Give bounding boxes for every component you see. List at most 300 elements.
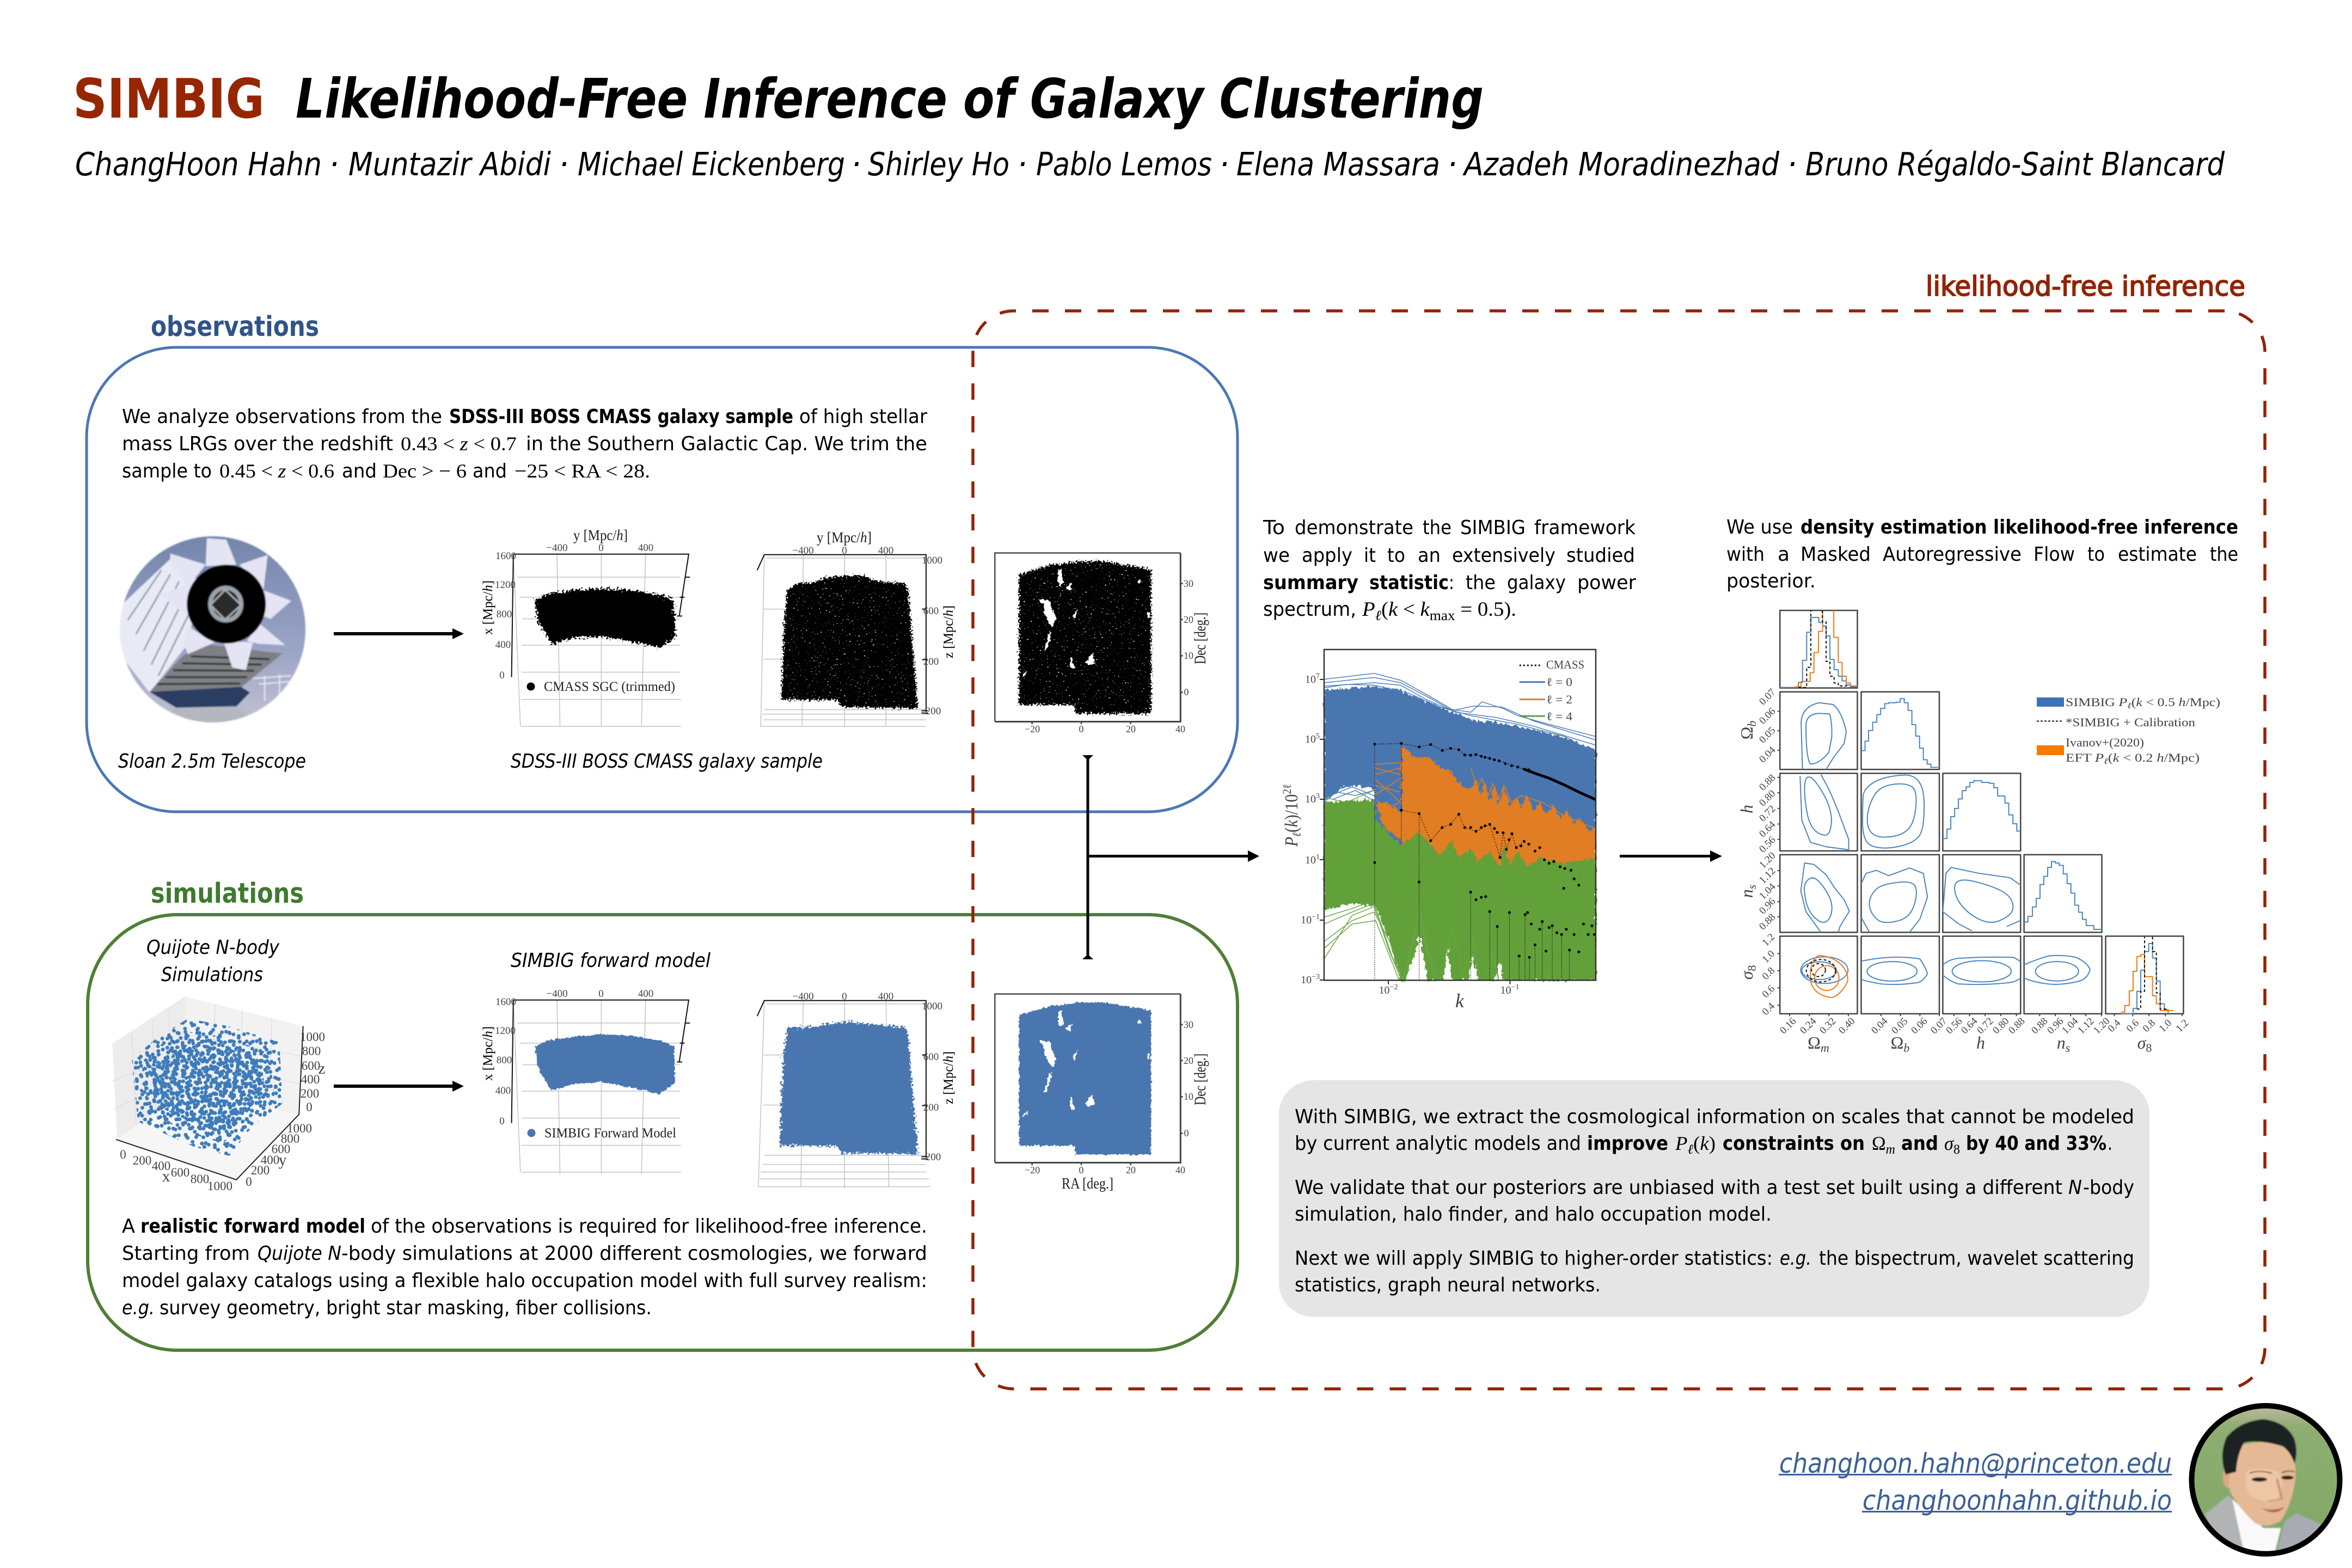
text block: power spectrum description: an <box>1418 544 1441 567</box>
text block: observations intro: and <box>342 460 377 482</box>
text: next steps: statistics, graph neural networks. <box>1295 1274 1601 1296</box>
chart: CMASS sky map RA-Dec: 40 <box>1175 724 1185 734</box>
legend: SIMBIG Forward Model: SIMBIG Forward Model <box>544 1126 676 1141</box>
text block: power spectrum description: it <box>1364 544 1376 567</box>
chart: SIMBIG forward model x-y projection <box>481 988 690 1174</box>
chart: CMASS 3D x-y projection: 800 <box>497 609 512 620</box>
axis titles: b <box>1745 721 1759 727</box>
text block: power spectrum description: framework <box>1534 517 1636 539</box>
text block: power spectrum description: ℓ <box>1375 608 1381 623</box>
legend: corner plot: Ivanov+(2020) <box>2066 736 2144 749</box>
axis tick labels: 0.16 <box>1778 1015 1799 1037</box>
chart: power spectrum multipoles: −3 <box>1312 973 1320 981</box>
legend: corner plot: SIMBIG P <box>2066 695 2126 709</box>
text block: power spectrum description: summary <box>1263 572 1358 594</box>
chart: CMASS sky map RA-Dec: −20 <box>1025 724 1040 734</box>
chart: Quijote 3D scatter cube: 400 <box>301 1073 320 1086</box>
axis tick labels: 0.88 <box>1757 911 1778 933</box>
caption: SIMBIG forward model: SIMBIG forward model <box>511 950 710 972</box>
axis titles: Ω <box>1808 1033 1821 1052</box>
chart: power spectrum multipoles: k <box>1455 990 1465 1012</box>
chart: SIMBIG forward model x-y projection: 400 <box>495 1085 511 1097</box>
axis tick labels: 1.12 <box>1757 865 1778 886</box>
text block: forward model description: Quijote N <box>258 1242 341 1265</box>
text: next steps: Next we will apply SIMBIG to higher-order statistics: <box>1295 1247 1773 1270</box>
axis tick labels: 0.4 <box>1760 1000 1778 1018</box>
text block: likelihood-free method: estimate <box>2118 543 2197 566</box>
text block: power spectrum description: apply <box>1302 544 1352 567</box>
legend: CMASS SGC: CMASS SGC (trimmed) <box>544 679 675 694</box>
axis tick labels: 1.04 <box>1757 881 1778 902</box>
axis tick labels: 1.2 <box>1760 932 1777 948</box>
text block: observations intro: −25 < RA < 28. <box>514 460 650 482</box>
heading: simulations: simulations <box>151 878 304 910</box>
chart: CMASS 3D y-z projection: 1000 <box>922 555 942 566</box>
chart: power spectrum multipoles: ( <box>1282 827 1302 832</box>
authors: · <box>1447 145 1457 183</box>
axis tick labels: 0.07 <box>1757 687 1778 708</box>
axis tick labels: 1.0 <box>2157 1018 2174 1034</box>
axis tick labels: 0.32 <box>1817 1015 1839 1037</box>
legend: corner plot: *SIMBIG + Calibration <box>2066 715 2195 729</box>
text: result: and <box>1901 1132 1938 1155</box>
title: Likelihood-Free Inference of Galaxy Clustering <box>296 67 1484 131</box>
text block: forward model description: of the observations is required for likelihood-free inference. <box>371 1215 927 1238</box>
chart: power spectrum multipoles: −2 <box>1390 983 1398 991</box>
authors: · <box>851 145 861 183</box>
axis titles: σ <box>1737 971 1756 979</box>
axis titles: Ω <box>1737 727 1756 739</box>
chart: CMASS sky map RA-Dec: 0 <box>1184 687 1189 697</box>
chart: power spectrum multipoles: −1 <box>1312 913 1320 921</box>
legend: corner plot: ℓ <box>2104 757 2108 766</box>
axis tick labels: 1.04 <box>2060 1015 2081 1037</box>
chart: CMASS 3D x-y projection: y [Mpc/h] <box>573 527 628 543</box>
chart: CMASS 3D y-z projection: 600 <box>923 605 939 617</box>
text block: power spectrum description: galaxy <box>1507 572 1566 594</box>
chart: power spectrum multipoles: 10 <box>1305 673 1316 685</box>
chart: power spectrum multipoles: 10 <box>1305 733 1316 745</box>
text block: likelihood-free method: the <box>2210 543 2238 566</box>
authors: · <box>1219 145 1229 183</box>
text block: power spectrum description: we <box>1263 544 1290 567</box>
chart: Quijote 3D scatter cube: 600 <box>272 1142 290 1156</box>
authors <box>75 145 2225 183</box>
chart: SIMBIG forward model y-z projection: 1000 <box>922 1001 942 1012</box>
axis tick labels: 1.12 <box>2075 1015 2097 1037</box>
chart: SIMBIG forward model x-y projection: 0 <box>598 988 604 1000</box>
chart: SIMBIG forward model y-z projection: 600 <box>923 1051 939 1063</box>
text: result: improve <box>1587 1132 1668 1155</box>
text block: likelihood-free method: We use <box>1726 516 1793 538</box>
chart: SIMBIG forward model y-z projection: 0 <box>842 991 847 1002</box>
legend: corner plot: ℓ <box>2127 702 2132 710</box>
axis tick labels: 1.20 <box>2091 1015 2112 1037</box>
text block: power spectrum description: SIMBIG <box>1460 517 1526 539</box>
text block: likelihood-free method: posterior. <box>1726 570 1816 592</box>
axis tick labels: 0.05 <box>1757 725 1778 746</box>
chart: power spectrum multipoles: P <box>1282 837 1302 847</box>
panel: observations box <box>87 347 1238 812</box>
panel frames <box>1780 610 2183 1014</box>
caption: Quijote N-body simulations <box>146 936 280 986</box>
axis tick labels: 0.8 <box>2141 1018 2158 1034</box>
chart: CMASS sky map RA-Dec: 20 <box>1126 724 1136 734</box>
text block: observations intro <box>122 406 927 482</box>
icon: Sloan telescope photo <box>117 534 309 726</box>
chart: SIMBIG forward model sky map: 10 <box>1184 1091 1193 1102</box>
axis tick labels: 0.6 <box>1760 983 1777 1000</box>
text block: power spectrum description: statistic <box>1369 572 1449 594</box>
text: result <box>1295 1106 2134 1157</box>
chart: SIMBIG forward model sky map: 0 <box>1184 1128 1189 1138</box>
axis tick labels <box>1757 687 2191 1037</box>
chart: CMASS 3D x-y projection: 0 <box>598 542 604 554</box>
caption: Quijote N-body simulations: Simulations <box>161 964 263 986</box>
panel: summary callout <box>1279 1080 2149 1317</box>
chart: Quijote 3D scatter cube <box>112 996 326 1193</box>
chart: CMASS 3D y-z projection: 400 <box>878 545 893 556</box>
text block: observations intro: Dec > − 6 <box>383 460 467 482</box>
chart: CMASS sky map RA-Dec: Dec [deg.] <box>1191 612 1209 664</box>
chart: CMASS 3D y-z projection: 200 <box>926 706 941 717</box>
axis tick labels: 0.6 <box>2124 1018 2141 1034</box>
chart: SIMBIG forward model x-y projection: x [Mpc/h] <box>481 1026 495 1081</box>
chart: Quijote 3D scatter cube: 600 <box>302 1059 320 1073</box>
text block: forward model description <box>122 1215 927 1319</box>
text block: power spectrum description: power <box>1577 572 1636 594</box>
text block: observations intro: 0.43 < z < 0.7 <box>401 433 517 455</box>
axis titles: n <box>1737 889 1756 898</box>
text: result: m <box>1886 1142 1895 1157</box>
text block: likelihood-free method: with <box>1726 543 1765 566</box>
chart: CMASS 3D y-z projection: −400 <box>792 545 814 556</box>
text block: forward model description: Starting from <box>122 1242 250 1265</box>
text block: power spectrum description: k < k <box>1388 598 1429 621</box>
chart area: spectra bands <box>1324 686 1596 981</box>
text block: observations intro: sample to <box>122 460 212 482</box>
chart: SIMBIG forward model sky map: −20 <box>1025 1165 1040 1175</box>
axis tick labels: 0.07 <box>1928 1015 1950 1037</box>
authors: Michael Eickenberg <box>578 145 845 183</box>
chart: CMASS 3D y-z projection: 200 <box>923 656 939 667</box>
text: next steps: the bispectrum, wavelet scattering <box>1819 1247 2134 1270</box>
text block: forward model description: A <box>122 1215 135 1238</box>
legend: power spectrum: ℓ = 0 <box>1546 675 1572 689</box>
chart: Quijote 3D scatter cube: 400 <box>152 1159 170 1173</box>
axis tick labels: 0.06 <box>1757 706 1778 727</box>
authors: Bruno Régaldo-Saint Blancard <box>1805 145 2225 183</box>
chart: Quijote 3D scatter cube: 200 <box>301 1087 319 1100</box>
text block: likelihood-free method: to <box>2087 543 2105 566</box>
chart: SIMBIG forward model sky map: 30 <box>1184 1019 1193 1030</box>
axis tick labels: 0.56 <box>1944 1015 1965 1037</box>
text: result: σ <box>1944 1132 1954 1154</box>
text block: likelihood-free method: a <box>1778 543 1790 566</box>
chart: power spectrum multipoles: k)/10 <box>1282 790 1302 827</box>
chart: power spectrum multipoles: 2ℓ <box>1280 784 1294 794</box>
text block: observations intro: in the Southern Galactic Cap. We trim the <box>526 433 927 455</box>
chart: CMASS sky map RA-Dec: 10 <box>1184 650 1193 661</box>
axis tick labels: 0.88 <box>2006 1015 2028 1037</box>
text block: power spectrum description: the <box>1423 517 1451 539</box>
chart: power spectrum multipoles: 5 <box>1316 732 1320 740</box>
text: validation: We validate that our posteriors are unbiased with a test set built using a different <box>1295 1177 2062 1199</box>
axis titles: Ω <box>1891 1033 1903 1052</box>
axis titles: h <box>1737 805 1756 813</box>
text block: likelihood-free method: Masked <box>1800 543 1871 566</box>
axis titles: s <box>1745 885 1759 889</box>
axis tick labels: 0.88 <box>1757 772 1778 793</box>
text block: observations intro: mass LRGs over the redshift <box>122 433 393 455</box>
text: validation: simulation, halo finder, and halo occupation model. <box>1295 1203 1772 1226</box>
text block: observations intro: and <box>473 460 507 482</box>
chart: power spectrum multipoles: 10 <box>1301 974 1312 986</box>
text block: observations intro: 0.45 < z < 0.6 <box>219 460 334 482</box>
authors: · <box>1787 145 1797 183</box>
axis tick labels: 0.64 <box>1757 819 1778 840</box>
icon: author portrait <box>2189 1405 2343 1555</box>
chart: Quijote 3D scatter cube: 1000 <box>287 1122 312 1135</box>
chart: power spectrum multipoles: 10 <box>1305 793 1316 805</box>
text block: power spectrum description: the <box>1466 572 1496 594</box>
text: result: Ω <box>1872 1132 1886 1154</box>
axis titles: 8 <box>1745 965 1759 971</box>
legend: power spectrum: CMASS <box>1546 658 1584 671</box>
legend: corner plot <box>2037 695 2220 766</box>
chart: CMASS 3D x-y projection: 1200 <box>495 579 516 591</box>
axis titles: b <box>1903 1041 1909 1055</box>
chart: power spectrum multipoles: 1 <box>1316 853 1320 861</box>
chart: CMASS 3D x-y projection: 1600 <box>495 550 516 562</box>
axis tick labels: 0.64 <box>1959 1015 1980 1037</box>
legend: power spectrum: ℓ = 2 <box>1546 693 1572 706</box>
legend: corner plot: ( <box>2132 695 2136 709</box>
text block: likelihood-free method: density estimation likelihood-free inference <box>1800 516 2238 538</box>
chart area: CMASS data points <box>1373 742 1596 959</box>
chart: power spectrum multipoles <box>1280 650 1596 1012</box>
chart: Quijote 3D scatter cube: 1000 <box>300 1030 325 1044</box>
chart: SIMBIG forward model x-y projection: −400 <box>546 988 568 1000</box>
axis titles: σ <box>2137 1033 2146 1052</box>
chart: SIMBIG forward model y-z projection: 400 <box>878 991 893 1002</box>
chart area: fringe lines <box>1324 673 1596 981</box>
axis tick labels: 0.56 <box>1757 834 1778 855</box>
heading: likelihood-free inference: likelihood-free inference <box>1926 271 2245 302</box>
axis tick labels: 0.72 <box>1975 1015 1996 1037</box>
text block: forward model description: model galaxy catalogs using a flexible halo occupation model with full survey realism: <box>122 1270 927 1292</box>
chart: SIMBIG forward model sky map: RA [deg.] <box>1062 1175 1113 1192</box>
authors: · <box>559 145 569 183</box>
chart: Quijote 3D scatter cube: 800 <box>302 1044 321 1058</box>
text: result: k) <box>1700 1132 1716 1154</box>
chart: SIMBIG forward model x-y projection: 0 <box>499 1116 505 1127</box>
authors: Azadeh Moradinezhad <box>1462 145 1779 183</box>
text block: forward model description: -body simulations at 2000 different cosmologies, we forward <box>341 1242 927 1265</box>
caption: Quijote N-body simulations: Quijote N-body <box>146 936 280 959</box>
chart: CMASS 3D x-y projection: 400 <box>638 542 653 554</box>
axis titles: s <box>2066 1041 2070 1055</box>
text: result: by current analytic models and <box>1295 1132 1581 1155</box>
axis tick labels: 0.80 <box>1757 788 1778 809</box>
text block: likelihood-free method <box>1726 516 2238 592</box>
title: SIMBIG <box>73 67 265 131</box>
text: validation <box>1295 1177 2134 1226</box>
authors: Pablo Lemos <box>1036 145 1212 183</box>
text block: likelihood-free method: Flow <box>2033 543 2075 566</box>
arrow: telescope to CMASS <box>334 628 464 639</box>
chart: power spectrum multipoles: 10 <box>1379 984 1390 996</box>
text block: power spectrum description: = 0.5). <box>1455 598 1516 621</box>
chart: power spectrum multipoles: ℓ <box>1290 832 1303 837</box>
authors: · <box>1017 145 1027 183</box>
axis tick labels: 0.24 <box>1798 1015 1819 1037</box>
chart: SIMBIG forward model x-y projection: 1200 <box>495 1025 516 1037</box>
chart: power spectrum multipoles: 10 <box>1305 854 1316 866</box>
text: result: 8 <box>1953 1142 1960 1157</box>
panel: simulations box <box>88 915 1238 1350</box>
text block: power spectrum description <box>1263 517 1636 623</box>
chart: power spectrum multipoles: 7 <box>1316 672 1320 681</box>
chart: CMASS 3D x-y projection: 400 <box>495 639 511 651</box>
text: validation: -body <box>2083 1177 2134 1199</box>
text block: power spectrum description: studied <box>1566 544 1635 567</box>
text block: power spectrum description: To <box>1263 517 1285 539</box>
chart: SIMBIG forward model y-z projection: −400 <box>792 991 814 1002</box>
authors: ChangHoon Hahn <box>75 145 322 183</box>
text block: forward model description: e.g. <box>122 1297 155 1319</box>
scatter points <box>132 1019 283 1156</box>
text block: power spectrum description: : <box>1449 572 1454 594</box>
chart: SIMBIG forward model x-y projection: 1600 <box>495 996 516 1008</box>
arrow: power spectrum to posterior <box>1620 850 1722 862</box>
text: result: ( <box>1693 1132 1700 1154</box>
chart: CMASS 3D y-z projection: 0 <box>842 545 847 556</box>
chart: power spectrum multipoles: 10 <box>1500 984 1511 996</box>
chart: CMASS 3D x-y projection <box>481 527 690 726</box>
chart: CMASS 3D y-z projection: z [Mpc/h] <box>941 605 956 658</box>
axis tick labels: 0.72 <box>1757 803 1778 824</box>
legend: corner plot: k < 0.5 h/Mpc) <box>2136 695 2215 709</box>
axis tick labels: 1.20 <box>1757 850 1778 871</box>
legend: corner plot: EFT P <box>2066 751 2102 764</box>
text block: power spectrum description: max <box>1430 608 1455 623</box>
chart: CMASS sky map RA-Dec: 20 <box>1184 614 1193 625</box>
contours and histograms: orange <box>1795 610 2173 1012</box>
chart: Quijote 3D scatter cube: 800 <box>191 1172 209 1186</box>
text block: observations intro: We analyze observations from the <box>122 406 442 428</box>
axis tick labels: 0.88 <box>2029 1015 2050 1037</box>
chart: SIMBIG forward model sky map <box>995 994 1209 1192</box>
chart: power spectrum multipoles: 3 <box>1316 792 1320 800</box>
axis tick labels: 0.04 <box>1869 1015 1890 1037</box>
chart: posterior corner plot <box>1737 610 2220 1055</box>
chart: power spectrum multipoles: −1 <box>1511 983 1519 991</box>
chart: CMASS 3D y-z projection: y [Mpc/h] <box>817 529 872 546</box>
text: result: ℓ <box>1687 1142 1694 1157</box>
arrow: vertical double-headed connector <box>1082 755 1093 959</box>
text block: observations intro: SDSS-III BOSS CMASS galaxy sample <box>449 406 793 428</box>
contact links <box>1779 1448 2172 1516</box>
chart: SIMBIG forward model sky map: Dec [deg.] <box>1191 1054 1209 1105</box>
axis tick labels: 0.04 <box>1757 744 1778 765</box>
axis tick labels: 0.06 <box>1909 1015 1930 1037</box>
axis tick labels: 0.8 <box>1760 965 1777 982</box>
axis tick labels: 1.0 <box>1760 948 1777 965</box>
axis tick labels: 0.4 <box>2106 1017 2123 1034</box>
text: next steps <box>1295 1247 2134 1296</box>
chart: SIMBIG forward model y-z projection: z [Mpc/h] <box>941 1051 956 1104</box>
axis titles: 8 <box>2146 1041 2152 1055</box>
axis tick labels: 0.96 <box>1757 896 1778 917</box>
axis titles <box>1737 721 2152 1055</box>
chart: CMASS 3D x-y projection: −400 <box>546 542 568 554</box>
text block: power spectrum description: spectrum, <box>1263 598 1356 621</box>
axis titles: h <box>1976 1033 1985 1052</box>
authors: Elena Massara <box>1236 145 1440 183</box>
tick marks <box>1778 712 2182 1016</box>
chart: SIMBIG forward model sky map: 20 <box>1126 1165 1136 1175</box>
text: result: . <box>2108 1132 2112 1155</box>
arrow: Quijote to SIMBIG forward model <box>334 1081 464 1092</box>
chart: SIMBIG forward model sky map: 20 <box>1184 1055 1193 1066</box>
text: result: P <box>1675 1132 1687 1154</box>
heading: observations: observations <box>151 311 319 343</box>
axis tick labels: 0.05 <box>1889 1015 1910 1037</box>
chart: SIMBIG forward model x-y projection: 400 <box>638 988 653 1000</box>
contact links: changhoon.hahn@princeton.edu <box>1779 1448 2172 1479</box>
arrow: connector to power spectrum <box>1089 850 1259 862</box>
chart: Quijote 3D scatter cube: 800 <box>281 1132 299 1146</box>
chart: Quijote 3D scatter cube: 200 <box>133 1154 151 1167</box>
chart: SIMBIG forward model y-z projection: 200 <box>926 1152 941 1163</box>
text block: observations intro: of high stellar <box>799 406 927 428</box>
text block: forward model description: realistic forward model <box>140 1215 365 1238</box>
text block: power spectrum description: demonstrate <box>1295 517 1413 539</box>
chart: Quijote 3D scatter cube: 0 <box>306 1100 313 1114</box>
chart: SIMBIG forward model y-z projection: 200 <box>923 1102 939 1113</box>
chart: CMASS 3D y-z projection <box>757 529 956 726</box>
chart: Quijote 3D scatter cube: 600 <box>171 1166 189 1179</box>
chart: CMASS sky map RA-Dec <box>995 553 1209 734</box>
axis titles: n <box>2057 1033 2066 1052</box>
caption: Sloan telescope: Sloan 2.5m Telescope <box>118 750 306 773</box>
axis tick labels: 1.2 <box>2174 1018 2191 1034</box>
text block: power spectrum description: to <box>1387 544 1405 567</box>
chart: Quijote 3D scatter cube: 1000 <box>207 1179 232 1193</box>
chart: CMASS sky map RA-Dec: 0 <box>1079 724 1083 734</box>
chart: power spectrum multipoles: 10 <box>1301 914 1312 926</box>
chart: Quijote 3D scatter cube: z <box>318 1059 326 1077</box>
caption: CMASS sample: SDSS-III BOSS CMASS galaxy sample <box>511 750 823 773</box>
panel: likelihood-free inference dashed box <box>973 311 2265 1389</box>
chart: SIMBIG forward model sky map: 40 <box>1175 1165 1185 1175</box>
authors: · <box>329 145 339 183</box>
text block: likelihood-free method: Autoregressive <box>1883 543 2022 566</box>
legend: power spectrum <box>1520 658 1584 723</box>
text: next steps: e.g. <box>1780 1247 1811 1270</box>
contours and histograms: black dashed <box>1798 610 2166 1009</box>
chart: Quijote 3D scatter cube: y <box>279 1151 286 1169</box>
text: result: With SIMBIG, we extract the cosmological information on scales that cannot be modeled <box>1295 1106 2134 1128</box>
chart: SIMBIG forward model y-z projection <box>757 991 956 1189</box>
axis titles: m <box>1821 1041 1829 1055</box>
chart: SIMBIG forward model sky map: 0 <box>1079 1165 1083 1175</box>
text block: forward model description: survey geometry, bright star masking, fiber collisions. <box>160 1297 652 1319</box>
text: validation: N <box>2068 1177 2082 1199</box>
chart: CMASS sky map RA-Dec: 30 <box>1184 578 1193 589</box>
chart: Quijote 3D scatter cube: 0 <box>120 1148 126 1161</box>
